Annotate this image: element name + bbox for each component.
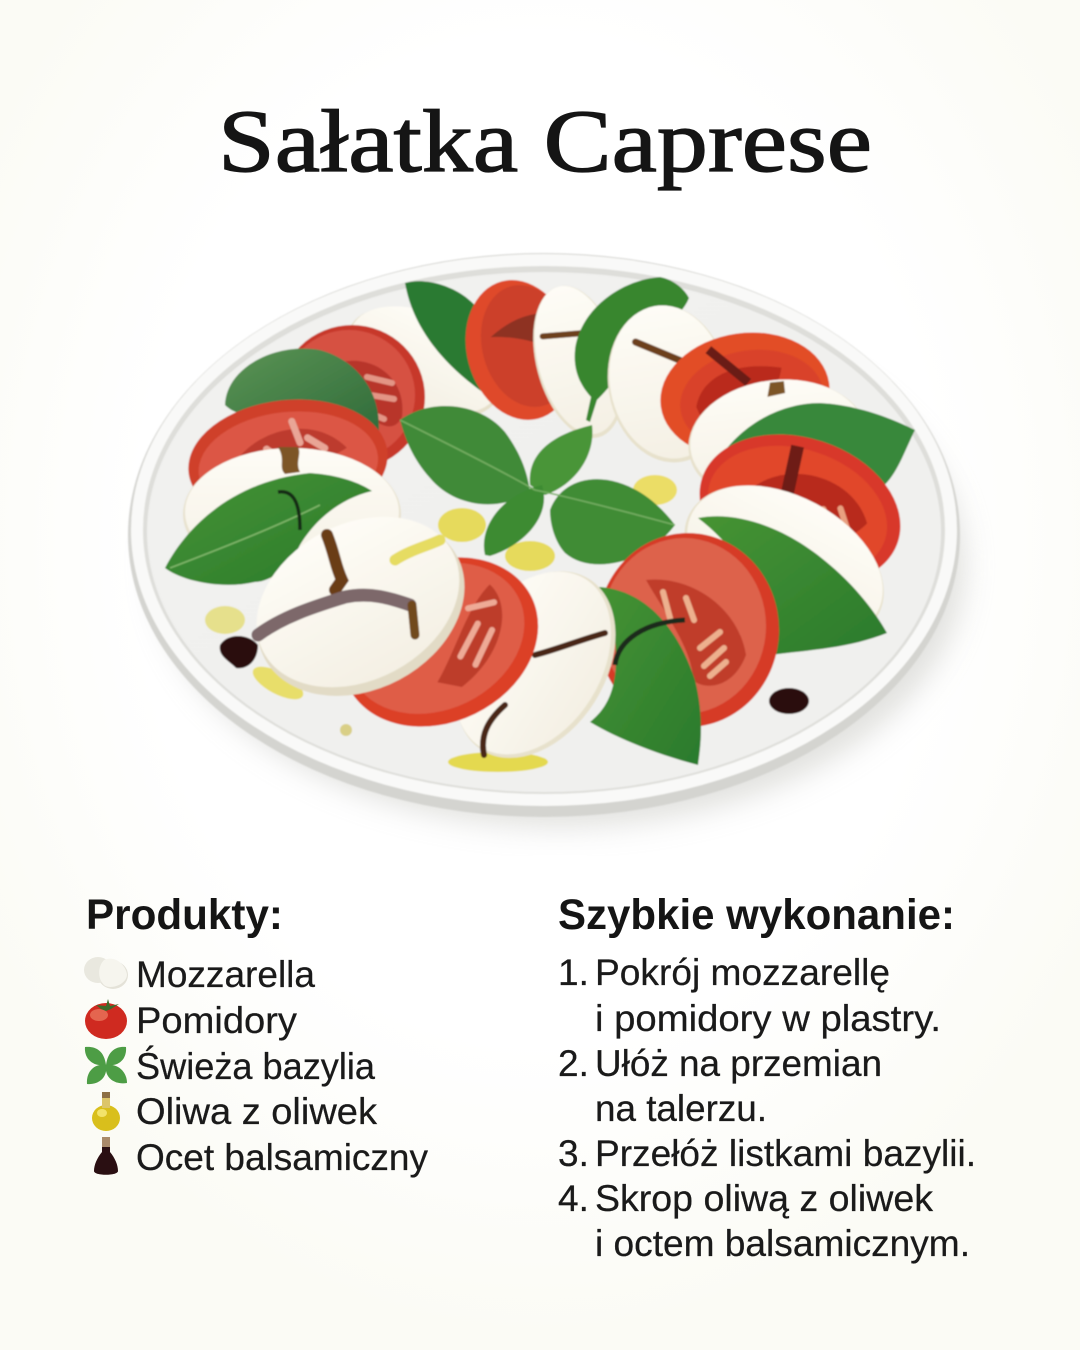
item: Oliwa z oliwek: Oliwa z oliwek [136,1091,378,1132]
oil and balsamic drops [205,475,809,772]
icon: mozzarella [84,957,128,989]
center leaf top [530,425,592,495]
mozzarella slice 4 [422,541,648,787]
mozzarella slice 6 [682,371,874,513]
step 2: na talerzu. [595,1088,767,1129]
basil leaf left front [165,473,372,585]
item: Świeża bazylia: Świeża bazylia [136,1045,375,1087]
veins and balsamic on left leaf [170,492,320,568]
center leaf left [400,406,530,504]
basil leaf left back [225,349,379,437]
tomato slice 5 [680,410,920,610]
center leaf bottom [484,485,544,556]
step 3: Przełóż listkami bazylii. [595,1133,976,1174]
mozzarella slice 5 [658,453,910,674]
tomato slice 7 [450,268,590,432]
step 2: 2. [558,1043,589,1084]
illustration: caprese plate [128,253,965,827]
balsamic on front slice [258,535,440,635]
mozzarella slice 3 front [225,482,496,731]
item: Mozzarella: Mozzarella [136,954,315,995]
icon: basil [85,1047,127,1084]
tomato slice 3 [313,525,567,759]
balsamic on slice 4 [483,633,605,755]
tomato slice 6 [652,322,838,468]
mozzarella slice 1 [329,284,519,441]
step 4: 4. [558,1178,589,1219]
icon: tomato [85,999,127,1039]
mozzarella slice 8 [518,276,639,448]
step 2 [558,1043,882,1129]
mozzarella slice 7 [596,296,741,472]
step 1: i pomidory w plastry. [595,998,941,1039]
plate [128,253,960,817]
center leaf right [550,479,675,564]
step 4 [558,1178,970,1264]
step 1 [558,952,941,1039]
tomato slice 4 [597,533,779,727]
icon: olive oil bottle [92,1092,120,1131]
tomato slice 1 [279,325,425,469]
step 4: Skrop oliwą z oliwek [595,1178,933,1219]
mozzarella slice 2 [183,447,401,580]
basil leaf top [405,281,497,402]
step 4: i octem balsamicznym. [595,1223,970,1264]
step 2: Ułóż na przemian [595,1043,882,1084]
center basil sprig [400,406,675,564]
icon: balsamic bottle [94,1137,118,1175]
item: Pomidory: Pomidory [136,1000,298,1041]
center veins [400,420,675,525]
basil leaf right [717,403,915,488]
step 1: Pokrój mozzarellę [595,952,890,993]
plate shadow [155,303,965,827]
tomato slice 2 [182,390,394,534]
balsamic on bottom leaf [615,620,685,665]
item: Ocet balsamiczny: Ocet balsamiczny [136,1137,428,1178]
title: Sałatka Caprese [218,93,872,191]
heading: products: Produkty: [86,891,283,939]
heading: quick preparation: Szybkie wykonanie: [558,891,955,939]
basil leaf bottom [590,587,701,765]
basil leaf lower right [698,516,887,655]
step 3: 3. [558,1133,589,1174]
step 1: 1. [558,952,589,993]
basil leaf top right [575,277,689,422]
